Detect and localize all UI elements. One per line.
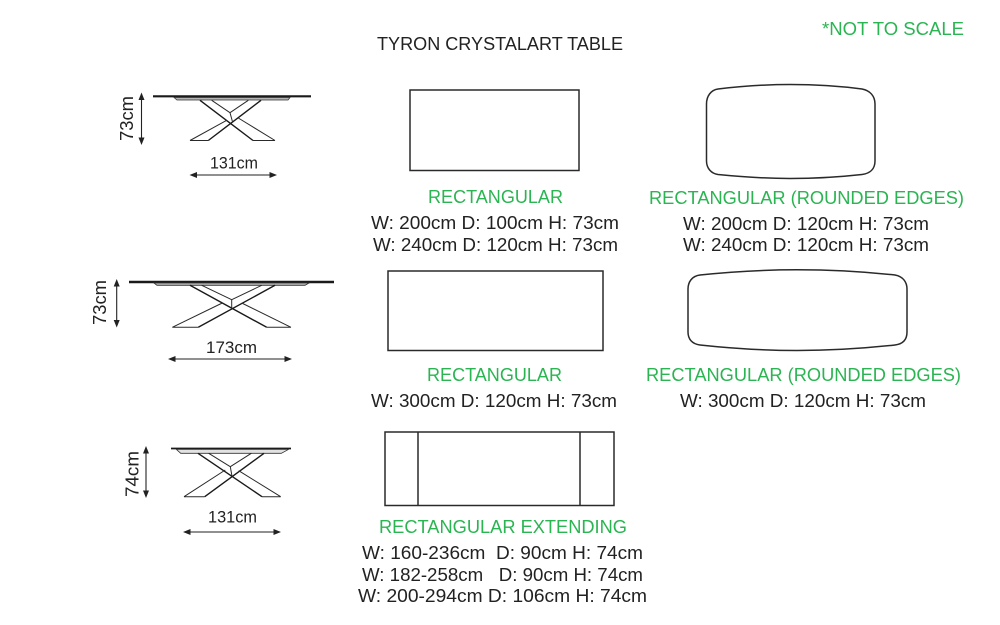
width dimension: 131cm	[210, 154, 258, 172]
label: rounded rectangular 300cm	[646, 365, 961, 411]
label: rectangular: RECTANGULAR	[428, 187, 563, 207]
width dimension: 173cm	[206, 338, 257, 357]
label: rounded rectangular 300cm: W: 300cm D: 120cm H: 73cm	[680, 391, 926, 411]
height dimension: 73cm	[117, 96, 137, 141]
plan: rectangular extending	[385, 432, 614, 506]
height dimension: 74cm	[122, 451, 142, 497]
side elevation: extending table, 74cm high	[122, 446, 291, 535]
label: rectangular extending: W: 200-294cm D: 106cm H: 74cm	[358, 586, 647, 606]
label: rectangular 300cm: RECTANGULAR	[427, 365, 562, 385]
label: rounded rectangular: W: 240cm D: 120cm H: 73cm	[683, 235, 929, 255]
width dimension	[168, 338, 292, 362]
label: rounded rectangular: RECTANGULAR (ROUNDED EDGES)	[649, 188, 964, 208]
plan: rectangular 200-240cm	[410, 90, 579, 170]
plan: rounded rectangular 300cm	[688, 270, 907, 350]
label: rectangular	[371, 187, 619, 255]
label: rectangular 300cm	[371, 365, 617, 411]
height dimension: 73cm	[90, 280, 110, 325]
label: rectangular extending: W: 182-258cm D: 90cm H: 74cm	[362, 565, 643, 585]
label: rectangular extending: RECTANGULAR EXTENDING	[379, 517, 627, 537]
title: TYRON CRYSTALART TABLE	[377, 34, 623, 54]
label: rounded rectangular	[649, 188, 964, 255]
side elevation: 131cm table, 73cm high	[117, 92, 311, 178]
label: rectangular: W: 240cm D: 120cm H: 73cm	[373, 235, 618, 255]
plan: rectangular 300cm	[388, 271, 603, 350]
label: rectangular extending	[358, 517, 647, 606]
width dimension	[190, 154, 277, 178]
label: rectangular: W: 200cm D: 100cm H: 73cm	[371, 213, 619, 233]
height dimension	[122, 446, 149, 498]
label: rectangular extending: W: 160-236cm D: 90cm H: 74cm	[362, 543, 643, 563]
side elevation: 173cm table, 73cm high	[90, 279, 334, 362]
label: rounded rectangular: W: 200cm D: 120cm H: 73cm	[683, 214, 929, 234]
label: rounded rectangular 300cm: RECTANGULAR (ROUNDED EDGES)	[646, 365, 961, 385]
height dimension	[117, 92, 144, 145]
height dimension	[90, 279, 120, 328]
plan: rounded rectangular 200-240cm	[706, 84, 875, 178]
label: rectangular 300cm: W: 300cm D: 120cm H: 73cm	[371, 391, 617, 411]
width dimension	[183, 508, 281, 535]
width dimension: 131cm	[208, 508, 257, 526]
scale note: *NOT TO SCALE	[822, 19, 964, 39]
